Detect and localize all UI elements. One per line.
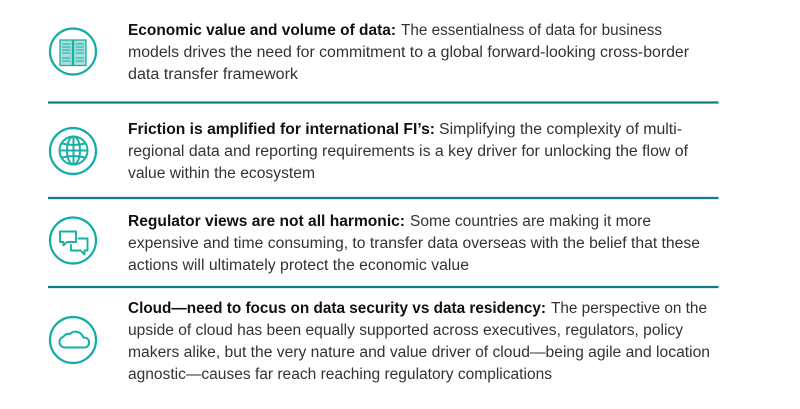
text: cloud: Cloud—need to focus on data security vs data residency: bbox=[128, 300, 546, 317]
icon: globe bbox=[50, 128, 96, 174]
text: cloud: agnostic—causes far reach reaching regulatory complications bbox=[128, 366, 552, 383]
text: regulator views: Regulator views are not all harmonic: bbox=[128, 213, 405, 230]
icon: data book bbox=[50, 28, 96, 74]
text: regulator views bbox=[128, 213, 700, 274]
text: economic value: The essentialness of data for business bbox=[401, 22, 662, 39]
text: friction: regional data and reporting requirements is a key driver for unlocking the flow of bbox=[128, 143, 689, 160]
text: regulator views: Some countries are making it more bbox=[410, 213, 651, 230]
text: regulator views: expensive and time consuming, to transfer data overseas with the belief that these bbox=[128, 235, 700, 252]
text: cloud: makers alike, but the very nature and value driver of cloud—being agile and location bbox=[128, 344, 710, 361]
icon: speech bubbles bbox=[50, 218, 96, 264]
icon: cloud bbox=[50, 317, 96, 363]
text: regulator views: actions will ultimately protect the economic value bbox=[128, 257, 469, 274]
text: economic value bbox=[128, 22, 689, 83]
text: economic value: Economic value and volume of data: bbox=[128, 22, 396, 39]
text: cloud bbox=[128, 300, 710, 383]
text: cloud: The perspective on the bbox=[551, 300, 707, 317]
text: friction: Simplifying the complexity of multi- bbox=[439, 121, 682, 138]
text: friction: Friction is amplified for international FI’s: bbox=[128, 121, 435, 138]
text: friction bbox=[128, 121, 689, 182]
text: economic value: data transfer framework bbox=[128, 66, 298, 83]
text: friction: value within the ecosystem bbox=[128, 165, 315, 182]
text: economic value: models drives the need for commitment to a global forward-looking cross-border bbox=[128, 44, 689, 61]
text: cloud: upside of cloud has been equally supported across executives, regulators, policy bbox=[128, 322, 683, 339]
